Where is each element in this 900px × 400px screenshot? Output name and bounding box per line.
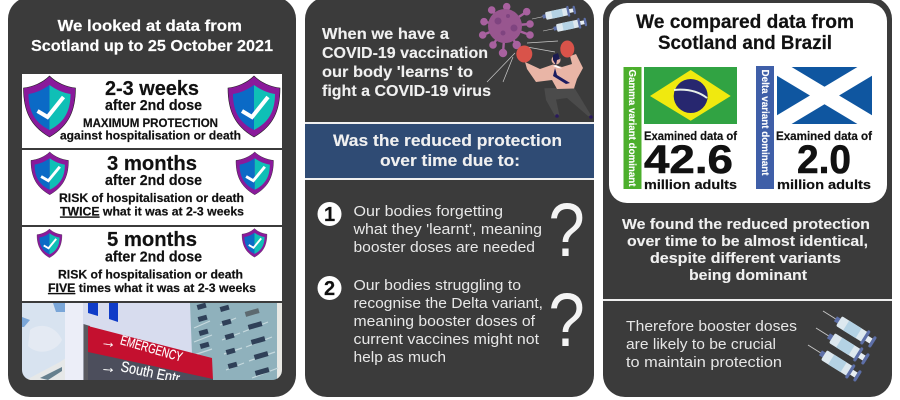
text: 2-3 weeks: against hospitalisation or death bbox=[60, 128, 241, 142]
stat: Brazil adults: million adults bbox=[644, 177, 737, 192]
banner: reduced protection question bbox=[305, 122, 594, 180]
photo: hospital emergency sign bbox=[22, 303, 282, 387]
photo: hospital emergency sign: EMERGENCY bbox=[119, 332, 184, 365]
text: vaccination learns bbox=[322, 26, 491, 100]
banner: reduced protection question: Was the reduced protection bbox=[333, 132, 562, 150]
label: gamma variant: Gamma variant dominant bbox=[626, 70, 638, 187]
text: 5 months: FIVE times what it was at 2-3 weeks bbox=[48, 281, 256, 295]
reason 1: booster doses are needed bbox=[354, 239, 535, 256]
text: findings: We found the reduced protection bbox=[622, 216, 870, 233]
reason 2: meaning booster doses of bbox=[354, 313, 536, 330]
text: findings bbox=[622, 216, 870, 284]
reason 2: ? bbox=[548, 278, 585, 363]
panel: how vaccination works bbox=[305, 0, 594, 397]
text: conclusion: are likely to be crucial bbox=[626, 336, 776, 353]
icon: small shield right bbox=[242, 228, 267, 257]
card: compared data bbox=[609, 3, 887, 203]
photo: hospital emergency sign: → bbox=[99, 333, 118, 352]
stat: Brazil adults bbox=[644, 131, 737, 192]
icon: impact lines bbox=[487, 41, 558, 82]
reason 2: recognise the Delta variant, bbox=[354, 295, 543, 312]
text: vaccination learns: fight a COVID-19 virus bbox=[322, 83, 491, 100]
text: conclusion bbox=[626, 318, 797, 371]
reason 2: Our bodies struggling to bbox=[354, 277, 521, 294]
text: 5 months bbox=[48, 229, 256, 295]
reason 1 bbox=[318, 188, 585, 273]
text: 5 months: 5 months bbox=[107, 229, 197, 251]
text: findings: over time to be almost identical, bbox=[627, 233, 868, 250]
heading: looked at data bbox=[31, 18, 273, 55]
text: 2-3 weeks: 2-3 weeks bbox=[105, 78, 199, 100]
icon: top syringes bbox=[531, 4, 588, 36]
text: 5 months: after 2nd dose bbox=[105, 250, 202, 266]
flag: Brazil bbox=[644, 67, 737, 124]
heading: compared data: Scotland and Brazil bbox=[658, 33, 832, 54]
reason 2 bbox=[318, 276, 585, 366]
icon: three syringes bbox=[804, 304, 878, 384]
reason 1: 1 bbox=[324, 204, 335, 226]
text: conclusion: to maintain protection bbox=[626, 354, 782, 371]
text: 5 months: RISK of hospitalisation or death bbox=[58, 268, 243, 282]
text: 3 months: RISK of hospitalisation or death bbox=[59, 191, 244, 205]
text: 3 months: TWICE what it was at 2-3 weeks bbox=[60, 204, 244, 218]
label: gamma variant bbox=[624, 67, 642, 189]
heading: compared data: We compared data from bbox=[636, 12, 854, 33]
icon: medium shield right bbox=[236, 152, 273, 195]
panel: Scotland and Brazil comparison bbox=[603, 0, 892, 397]
stat: Scotland adults: 2.0 bbox=[797, 138, 851, 182]
reason 1: what they 'learnt', meaning bbox=[352, 221, 542, 238]
banner: reduced protection question: over time due to: bbox=[380, 152, 520, 170]
stat: Brazil adults: 42.6 bbox=[644, 138, 733, 182]
icon: boxer bbox=[516, 40, 593, 119]
text: vaccination learns: When we have a bbox=[322, 26, 449, 43]
icon: large shield left bbox=[24, 76, 76, 137]
icon: small shield left bbox=[37, 229, 62, 258]
text: 3 months bbox=[59, 153, 244, 218]
text: 2-3 weeks: MAXIMUM PROTECTION bbox=[83, 116, 218, 130]
text: 2-3 weeks: after 2nd dose bbox=[105, 98, 202, 114]
reason 1: ? bbox=[548, 188, 585, 273]
heading: compared data bbox=[636, 12, 854, 54]
text: conclusion: Therefore booster doses bbox=[626, 318, 797, 335]
reason 2: 2 bbox=[324, 278, 335, 300]
stat: Brazil adults: Examined data of bbox=[644, 131, 737, 143]
stat: Scotland adults bbox=[776, 131, 872, 192]
text: vaccination learns: our body 'learns' to bbox=[322, 64, 473, 81]
flag: Scotland bbox=[777, 67, 872, 124]
card: 5 months bbox=[22, 227, 282, 301]
text: 2-3 weeks bbox=[60, 78, 241, 142]
text: findings: being dominant bbox=[689, 267, 807, 284]
text: 3 months: after 2nd dose bbox=[105, 173, 202, 189]
heading: looked at data: Scotland up to 25 October 2021 bbox=[31, 38, 273, 55]
label: delta variant bbox=[756, 66, 774, 189]
icon: large shield right bbox=[228, 76, 280, 137]
photo: hospital emergency sign: → bbox=[100, 359, 117, 377]
card: 2-3 weeks bbox=[22, 74, 282, 148]
reason 1: Our bodies forgetting bbox=[354, 203, 503, 220]
panel: data from Scotland bbox=[8, 0, 296, 397]
stat: Scotland adults: Examined data of bbox=[776, 131, 872, 143]
stat: Scotland adults: million adults bbox=[777, 177, 871, 192]
heading: looked at data: We looked at data from bbox=[58, 18, 242, 35]
reason 2: current vaccines might not bbox=[354, 331, 540, 348]
card: 3 months bbox=[22, 150, 282, 225]
icon: virus bbox=[480, 4, 533, 56]
text: 3 months: 3 months bbox=[107, 153, 197, 175]
text: findings: despite different variants bbox=[650, 250, 841, 267]
photo: hospital emergency sign: South Entr bbox=[119, 358, 181, 387]
label: delta variant: Delta variant dominant bbox=[759, 70, 771, 176]
icon: medium shield left bbox=[31, 152, 68, 195]
reason 2: help as much bbox=[354, 349, 446, 366]
text: vaccination learns: COVID-19 vaccination bbox=[322, 45, 488, 62]
